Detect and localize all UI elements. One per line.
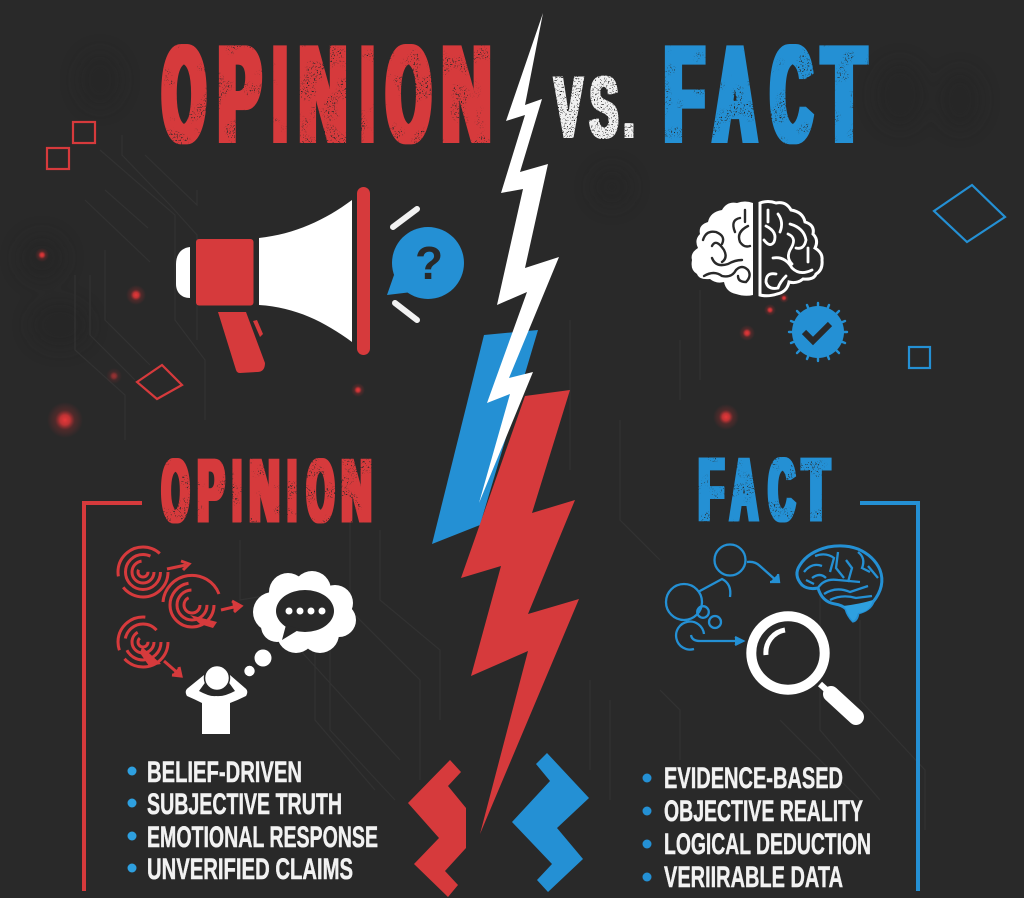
list: fact traits: EVIDENCE-BASED (664, 762, 843, 795)
list: opinion traits (128, 756, 378, 886)
title word: fact: F (664, 18, 704, 170)
panel: fact (642, 440, 918, 894)
list: opinion traits: BELIEF-DRIVEN (147, 756, 302, 789)
icon: megaphone (176, 187, 464, 373)
icon: white brain (692, 202, 822, 296)
heading: opinion: N (250, 441, 279, 540)
title word: fact: C (771, 18, 812, 170)
title word: opinion: O (163, 18, 205, 170)
title word: fact: A (714, 18, 756, 170)
icon: question bubble (387, 227, 464, 299)
title word: fact: T (823, 18, 865, 170)
list: fact traits: LOGICAL DEDUCTION (664, 828, 871, 861)
panel: opinion: N (342, 441, 371, 540)
heading: opinion: I (233, 441, 241, 540)
panel bracket: fact (860, 503, 918, 891)
main title (163, 18, 865, 170)
heading: fact: C (769, 440, 795, 539)
red lightning bolt (461, 390, 579, 834)
heading: opinion: I (288, 441, 296, 540)
icon: person holding head (186, 666, 247, 734)
list: opinion traits: UNVERIFIED CLAIMS (147, 853, 353, 886)
icon: thought cloud with speech bubble (244, 571, 356, 676)
title word: opinion: P (219, 18, 260, 170)
red zigzag shard (408, 760, 466, 897)
heading: fact: A (730, 440, 758, 539)
heading: opinion: P (198, 441, 224, 540)
title word: opinion: N (299, 18, 346, 170)
decorative blue shapes (909, 185, 1005, 368)
icon: blue brain (797, 546, 882, 621)
panel: fact: T (803, 440, 829, 539)
icon: spirals with arrows (118, 547, 241, 676)
list: fact traits (642, 762, 871, 894)
title word: opinion: I (362, 18, 372, 170)
lightning bolt divider (408, 13, 589, 897)
panel bracket: opinion (84, 503, 142, 891)
main title: N (442, 18, 491, 170)
decorative red squares (47, 122, 182, 399)
heading: opinion: O (162, 441, 189, 540)
list: fact traits: VERIIRABLE DATA (664, 861, 843, 894)
icon: logic nodes with arrows (666, 544, 779, 650)
icon: verified badge (789, 303, 847, 361)
list: fact traits: OBJECTIVE REALITY (664, 795, 863, 828)
list: opinion traits: EMOTIONAL RESPONSE (147, 821, 378, 854)
heading: fact: F (699, 440, 724, 539)
title word: vs: S (590, 60, 618, 156)
icon: magnifying glass (751, 616, 856, 717)
title word: opinion: O (387, 18, 430, 170)
blue zigzag shard (512, 753, 589, 892)
white lightning bolt (479, 13, 559, 503)
heading: opinion: O (307, 441, 334, 540)
icon: question bubble: ? (415, 237, 443, 289)
title word: vs: V (554, 60, 582, 156)
panel: opinion (84, 441, 378, 891)
list: opinion traits: SUBJECTIVE TRUTH (147, 788, 342, 821)
main title: . (624, 60, 634, 156)
blue bolt segment (432, 330, 538, 544)
title word: opinion: I (274, 18, 286, 170)
